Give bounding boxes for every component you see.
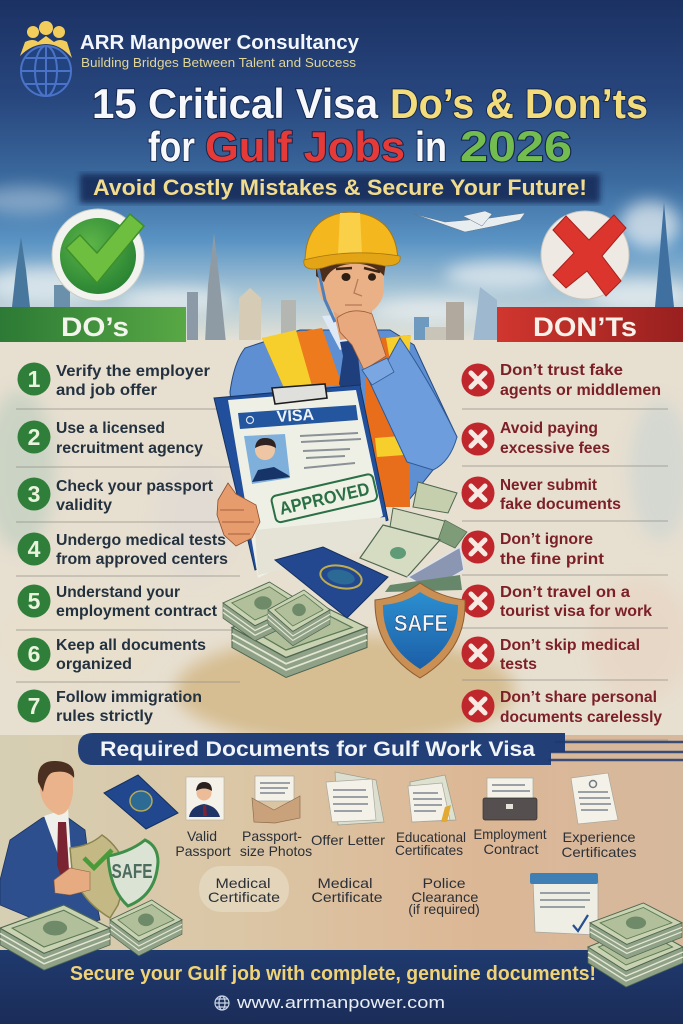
- visa header: [238, 405, 358, 429]
- item 7: [18, 689, 202, 725]
- label: educational certificates: Certificates: [395, 842, 463, 858]
- worker neck and face: [316, 262, 386, 340]
- label: employment contract: Contract: [484, 841, 539, 857]
- footer: website: www.arrmanpower.com: [236, 993, 445, 1012]
- item 6: Keep all documents: [56, 637, 206, 654]
- background: city skyline: [12, 202, 674, 405]
- document labels: [175, 826, 636, 917]
- item: excessive fees: Avoid paying: [500, 420, 598, 437]
- title: in: [415, 123, 447, 170]
- label: passport-size photos: Passport-: [242, 828, 302, 844]
- form lines: [300, 433, 361, 468]
- item 3: validity: [56, 497, 112, 514]
- item: fine print: Don’t ignore: [500, 531, 593, 548]
- passport: [275, 547, 388, 618]
- clipboard with visa form: [214, 384, 390, 578]
- title: Do’s & Don’ts: [390, 80, 648, 127]
- logo: [20, 21, 72, 96]
- label: passport-size photos: [240, 828, 312, 859]
- heading band: required documents: [78, 733, 683, 765]
- worker collar and tie: [322, 312, 378, 400]
- item 4: 4: [28, 536, 41, 562]
- label: police clearance: Clearance: [412, 889, 479, 905]
- item 5: employment contract: [56, 603, 218, 620]
- item 7: rules strictly: [56, 708, 153, 725]
- money pile: right: [360, 482, 467, 592]
- label: offer letter: Offer Letter: [311, 832, 385, 848]
- icon: employment contract: [483, 778, 537, 820]
- worker hard hat: [304, 212, 400, 269]
- label: employment contract: [474, 826, 547, 857]
- item 5: Understand your: [56, 584, 180, 601]
- item 5: [18, 584, 218, 620]
- icon: passport: [104, 775, 178, 829]
- item: fine print: the fine print: [500, 551, 605, 568]
- item: fake documents: [462, 476, 621, 513]
- lower sheet: [255, 517, 390, 575]
- footer band: [0, 950, 683, 1024]
- businessman body: [0, 812, 100, 930]
- item: fake agents: agents or middlemen: [500, 382, 661, 399]
- money pile: centre: [223, 582, 367, 678]
- label: educational certificates: [395, 829, 466, 858]
- label: passport-size photos: size Photos: [240, 843, 312, 859]
- subtitle band: Avoid Costly Mistakes & Secure Your Future!: [93, 175, 587, 200]
- item 1: Verify the employer: [56, 363, 210, 380]
- company name: ARR Manpower Consultancy: [80, 32, 360, 54]
- tagline: Building Bridges Between Talent and Success: [81, 56, 356, 70]
- icon: clearance document: [530, 873, 598, 935]
- logo globe: [21, 46, 71, 96]
- title: [92, 80, 648, 171]
- panel: lower content background: [0, 340, 683, 735]
- panel: do list: [16, 362, 240, 725]
- label: valid passport: Passport: [175, 843, 231, 859]
- worker sleeve: [365, 338, 457, 470]
- visa sheet: [228, 390, 383, 578]
- label: medical certificate 2: Certificate: [312, 889, 383, 905]
- icon: photo: [186, 777, 224, 820]
- icon: red cross: [541, 211, 629, 299]
- item: excessive fees: [462, 420, 610, 457]
- item 6: [18, 637, 206, 673]
- item 4: from approved centers: [56, 551, 228, 568]
- item 3: Check your passport: [56, 478, 214, 495]
- label: police clearance: Police: [422, 875, 466, 891]
- green shield: SAFE: [112, 861, 152, 883]
- item: medical tests: [462, 636, 640, 673]
- item: fake agents: Don’t trust fake: [500, 362, 623, 379]
- label: medical certificate 1: [208, 875, 280, 905]
- banner: DON'Ts: DON’Ts: [533, 312, 637, 342]
- label: employment contract: Employment: [474, 826, 547, 842]
- item 4: Undergo medical tests: [56, 532, 226, 549]
- item 2: recruitment agency: [56, 440, 203, 457]
- label: educational certificates: Educational: [396, 829, 466, 845]
- label: medical certificate 1: Medical: [216, 875, 270, 891]
- clip: [272, 384, 327, 404]
- green shield: [70, 835, 158, 918]
- item 6: organized: [56, 656, 132, 673]
- item 2: 2: [28, 424, 40, 450]
- worker vest: [262, 328, 411, 507]
- item: medical tests: Don’t skip medical: [500, 637, 640, 654]
- money pile: bottom left: [0, 900, 182, 970]
- item 2: [18, 420, 203, 457]
- item 4: [18, 532, 228, 568]
- businessman hand: [54, 868, 90, 895]
- businessman head: [40, 761, 73, 815]
- item: personal documents: documents carelessly: [500, 709, 662, 726]
- title: for: [148, 123, 195, 170]
- banner: DO's: [0, 307, 186, 342]
- holding hand: [217, 483, 260, 546]
- heading band: required documents: Required Documents for Gulf Work Visa: [100, 738, 535, 761]
- item 2: Use a licensed: [56, 420, 165, 437]
- label: experience certificates: Certificates: [562, 844, 636, 860]
- item 3: [18, 478, 214, 514]
- divider pill: [199, 866, 289, 912]
- logo figures: [20, 21, 72, 58]
- icon: envelope: [252, 776, 300, 823]
- icon: green check: [52, 209, 144, 301]
- label: police clearance: [408, 875, 480, 917]
- background: clouds: [0, 186, 683, 322]
- worker torso and shirt: [230, 330, 457, 505]
- panel: don't list: [462, 362, 668, 740]
- item: personal documents: [462, 689, 662, 726]
- label: police clearance: (if required): [408, 901, 480, 917]
- approved stamp: APPROVED: [277, 479, 371, 519]
- label: valid passport: Valid: [187, 828, 217, 844]
- item 1: and job offer: [56, 382, 157, 399]
- airplane: [414, 211, 525, 232]
- label: medical certificate 2: [312, 875, 383, 905]
- safe shield: SAFE: [394, 610, 448, 636]
- businessman shirt and tie: [44, 808, 72, 880]
- title: 2026: [460, 123, 572, 171]
- clipboard board: [214, 385, 388, 570]
- icon: educational certificates: [408, 775, 456, 822]
- banner: DO's: DO’s: [61, 312, 129, 342]
- footer: call to action: Secure your Gulf job with complete, genuine documents!: [70, 963, 596, 985]
- icon: experience certificates: [571, 773, 618, 824]
- worker hand on chin: [337, 311, 386, 370]
- money pile: bottom right: [588, 903, 683, 987]
- background: central sand: [175, 635, 515, 745]
- illustration: businessman with shield: [0, 761, 158, 930]
- label: experience certificates: Experience: [562, 829, 636, 845]
- title: 15 Critical Visa: [92, 80, 379, 127]
- item: personal documents: Don’t share personal: [500, 689, 657, 706]
- item: medical tests: tests: [500, 656, 537, 673]
- item: fine print: [462, 530, 605, 568]
- label: medical certificate 1: Certificate: [208, 889, 280, 905]
- background: soft tint patches: [0, 390, 683, 700]
- title: Gulf Jobs: [205, 123, 405, 170]
- item: fake documents: fake documents: [500, 496, 621, 513]
- visa header: VISA: [276, 407, 315, 426]
- item: fake agents: [462, 362, 661, 399]
- document icons row: [104, 772, 618, 829]
- label: valid passport: [175, 828, 231, 859]
- background: lower paper: [0, 735, 683, 955]
- item: fake documents: Never submit: [500, 477, 598, 494]
- safe shield: [375, 583, 465, 678]
- label: medical certificate 2: Medical: [318, 875, 372, 891]
- banner: DON'Ts: [497, 307, 683, 342]
- background: sky: [0, 0, 683, 345]
- illustration: worker: [230, 212, 457, 507]
- item 1: 1: [28, 366, 41, 392]
- item: tourist visa: [462, 584, 652, 620]
- worker cuff: [362, 358, 394, 385]
- item 1: [18, 362, 210, 399]
- photo on form: [244, 434, 290, 484]
- businessman hair: [38, 761, 74, 792]
- icon: offer letter: [326, 772, 384, 825]
- item 7: Follow immigration: [56, 689, 202, 706]
- item 3: 3: [28, 481, 40, 507]
- item 5: 5: [28, 588, 41, 614]
- item: tourist visa: tourist visa for work: [500, 603, 652, 620]
- item: tourist visa: Don’t travel on a: [500, 584, 630, 601]
- item 6: 6: [28, 641, 40, 667]
- item 7: 7: [28, 693, 40, 719]
- item: excessive fees: excessive fees: [500, 440, 610, 457]
- label: experience certificates: [562, 829, 636, 860]
